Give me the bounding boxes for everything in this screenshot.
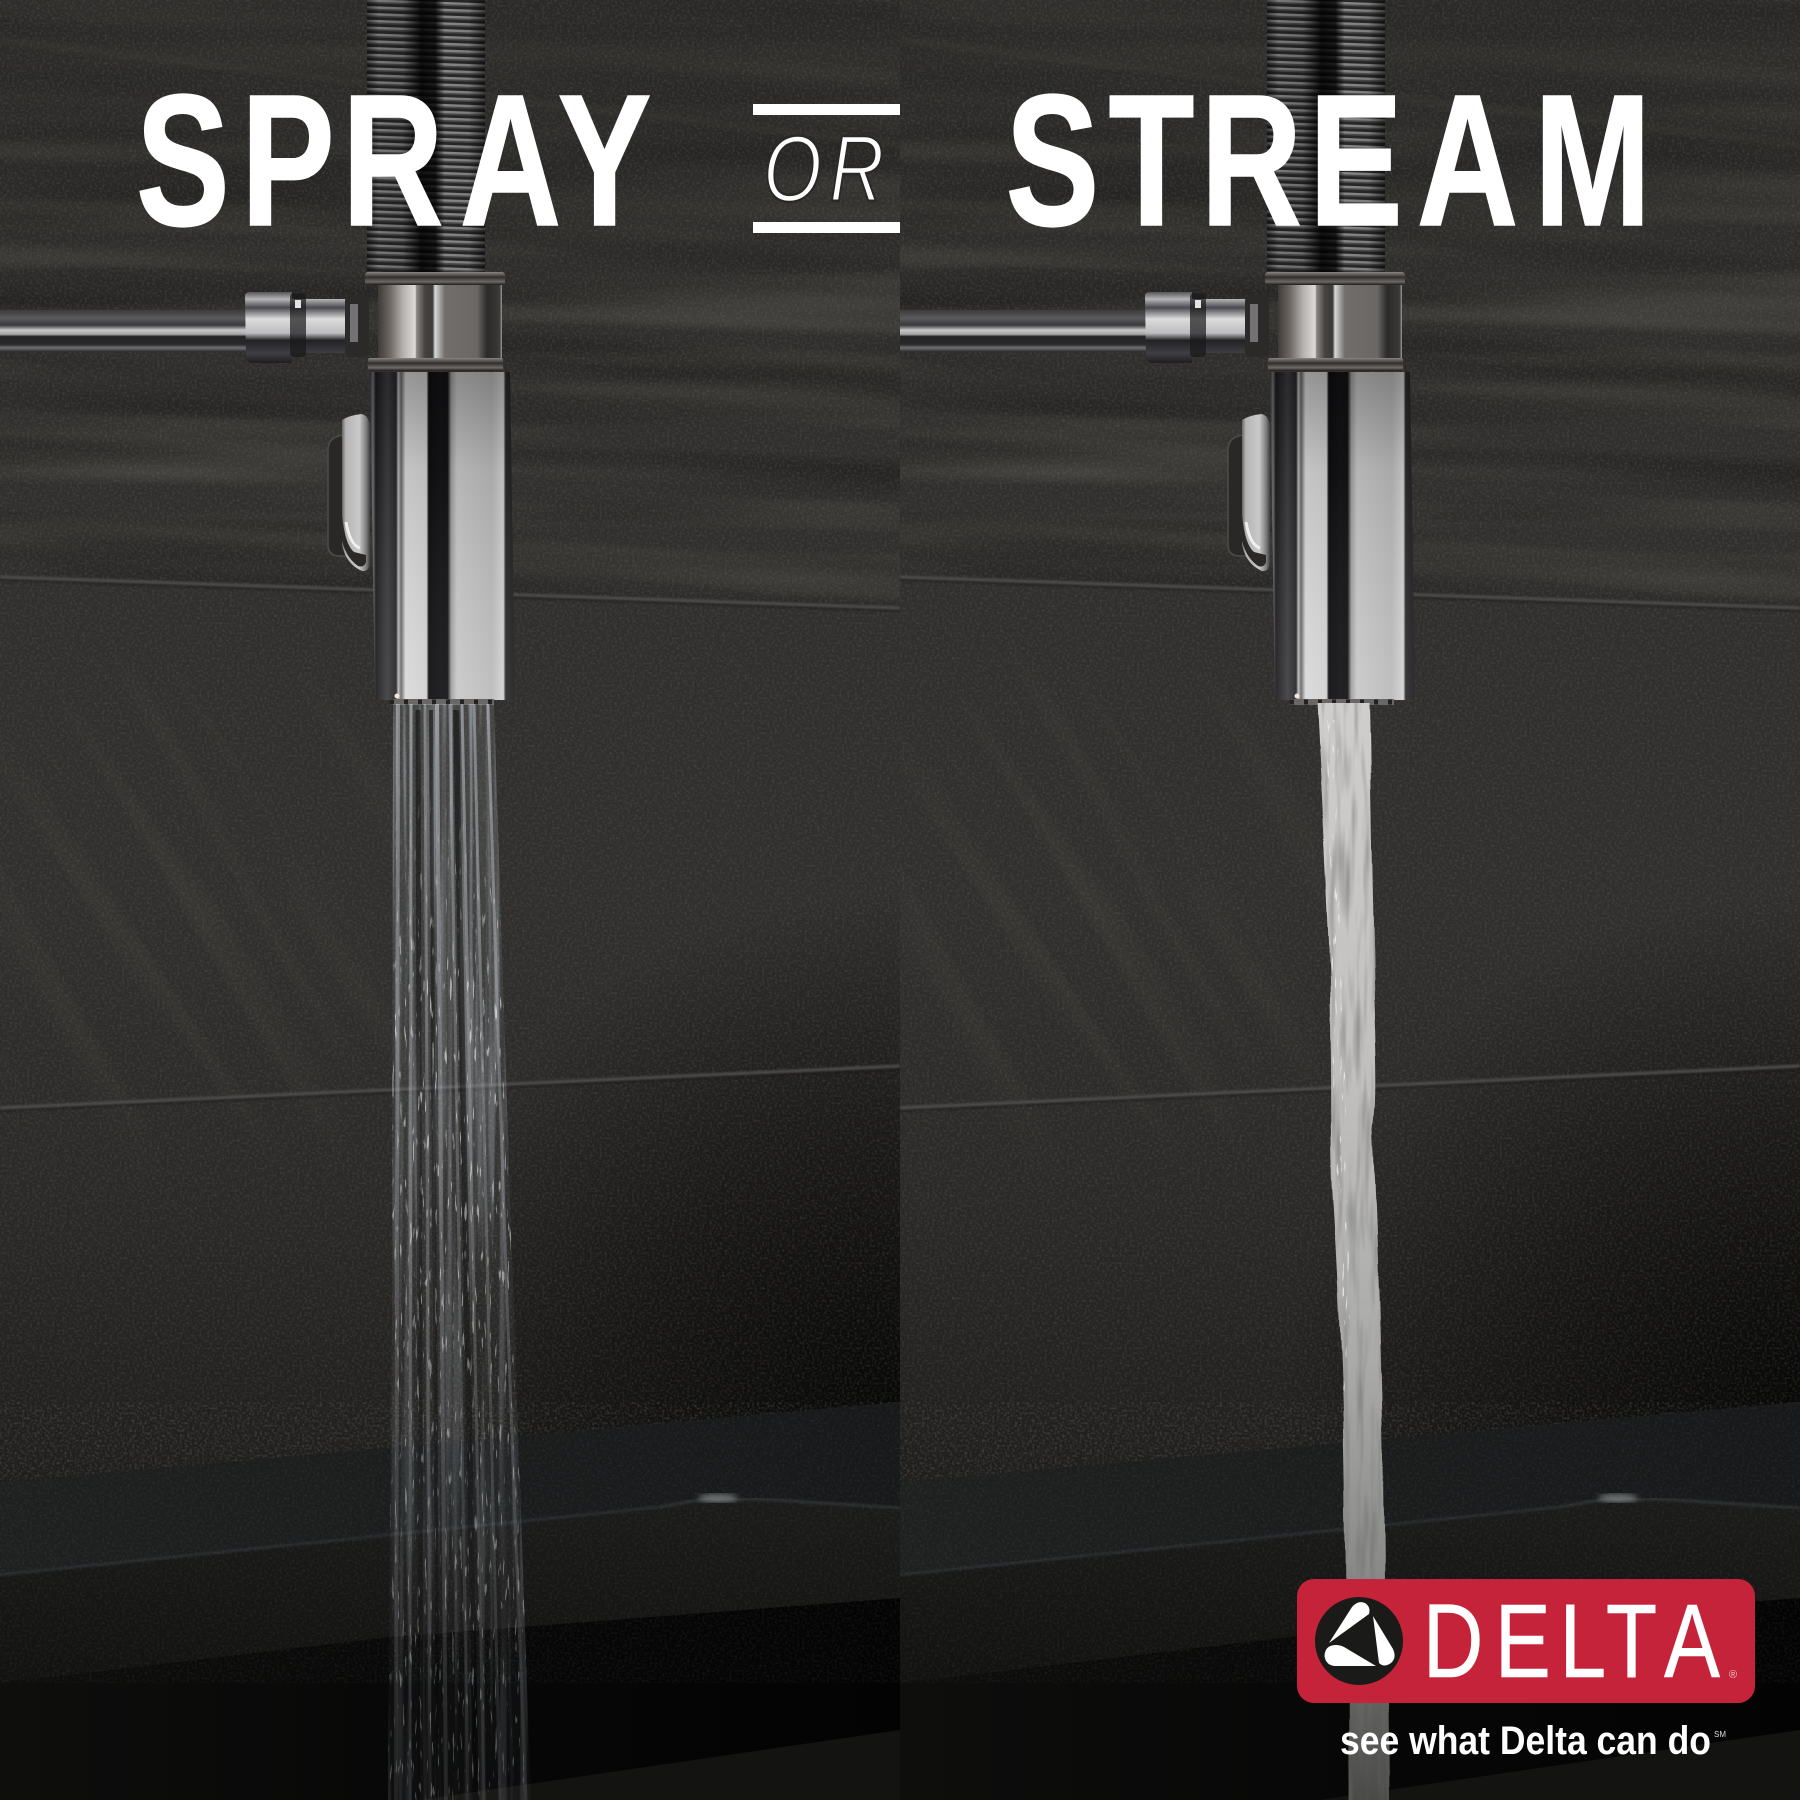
or divider with rules (753, 104, 900, 233)
panel: spray side (0, 0, 900, 1800)
title: SPRAY: SPRAY (136, 56, 651, 266)
icon: delta tri-blade emblem (1315, 1597, 1403, 1685)
Delta logo badge (1297, 1579, 1755, 1703)
faucet head with hose and side arm (0, 0, 515, 705)
wordmark: DELTA: DELTA (1423, 1583, 1721, 1700)
faucet head with hose and side arm (900, 0, 1415, 705)
label: or: OR (763, 117, 884, 222)
tagline: see what Delta can do (1340, 1719, 1711, 1763)
water spray (388, 704, 528, 1800)
water stream (1317, 703, 1387, 1800)
service mark: SM (1714, 1730, 1726, 1739)
tile wall and countertop background (0, 0, 1022, 1800)
panel: stream side (899, 0, 1800, 1800)
title: STREAM: STREAM (1006, 56, 1651, 266)
registered mark: ® (1729, 1669, 1737, 1681)
